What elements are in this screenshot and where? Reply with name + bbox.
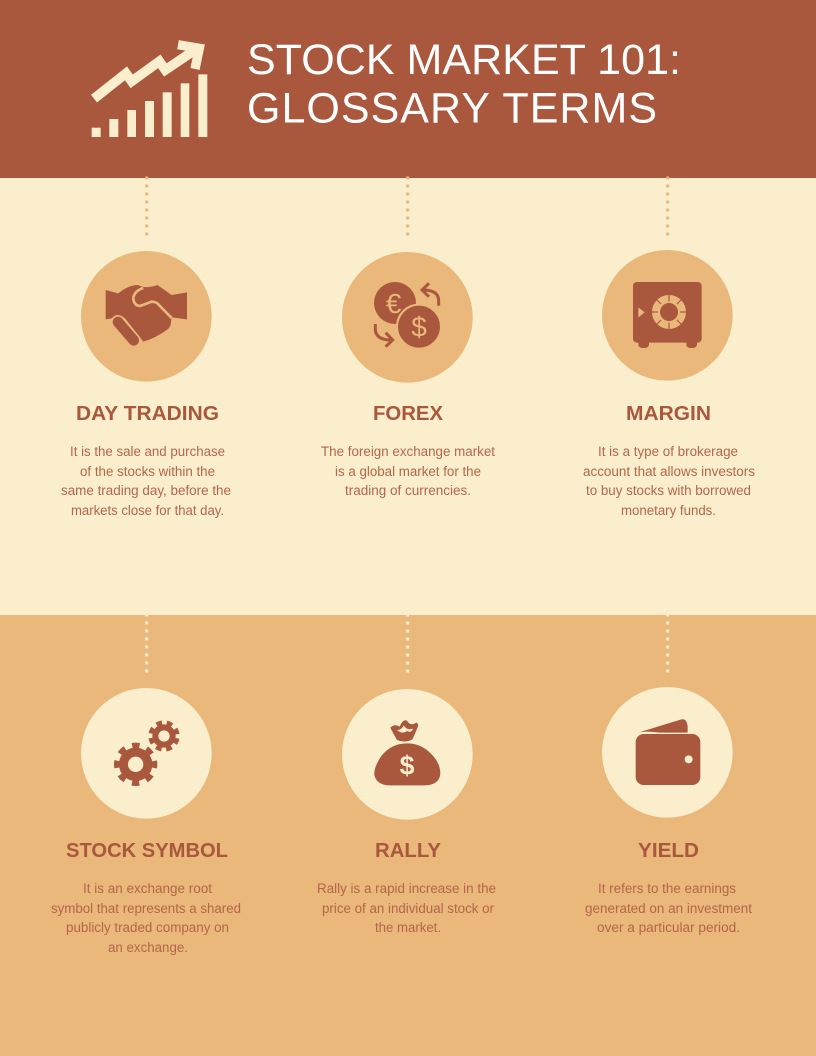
text: yield description: over a particular period. xyxy=(597,920,740,935)
icon: currency exchange: $ xyxy=(411,312,427,343)
panel: rally xyxy=(317,614,496,935)
text: day trading description: of the stocks within the xyxy=(80,464,215,479)
heading: forex: FOREX xyxy=(373,403,444,425)
icon: wallet xyxy=(602,687,733,818)
text: margin description xyxy=(583,444,755,518)
text: rally description xyxy=(317,881,496,935)
icon: currency exchange xyxy=(342,252,473,383)
text: yield description: generated on an investment xyxy=(585,901,752,916)
title xyxy=(247,36,681,132)
panel: stock symbol xyxy=(51,614,241,955)
text: forex description: is a global market for the xyxy=(335,464,481,479)
text: rally description: price of an individual stock or xyxy=(322,901,495,916)
text: forex description: trading of currencies. xyxy=(345,483,471,498)
text: rally description: the market. xyxy=(375,920,441,935)
text: day trading description: markets close for that day. xyxy=(71,503,224,518)
text: day trading description: same trading day, before the xyxy=(61,483,231,498)
icon: safe xyxy=(602,250,733,381)
icon: money bag xyxy=(342,689,473,820)
text: day trading description xyxy=(61,444,231,518)
panel: yield xyxy=(585,614,752,935)
icon: handshake xyxy=(81,251,212,382)
icon: currency exchange: € xyxy=(386,288,402,319)
icon: rising bar chart with arrow xyxy=(92,45,207,137)
text: margin description: account that allows investors xyxy=(583,464,755,479)
heading: rally: RALLY xyxy=(375,840,442,862)
heading: day trading: DAY TRADING xyxy=(76,403,219,425)
panel: day trading xyxy=(61,176,231,518)
text: day trading description: It is the sale and purchase xyxy=(70,444,225,459)
panel: margin xyxy=(583,176,755,518)
panel: header banner xyxy=(0,0,816,178)
title: STOCK MARKET 101: xyxy=(247,36,681,84)
text: rally description: Rally is a rapid increase in the xyxy=(317,881,496,896)
text: margin description: to buy stocks with borrowed xyxy=(586,483,751,498)
text: stock symbol description xyxy=(51,881,241,955)
icon: money bag: $ xyxy=(400,750,415,780)
heading: margin: MARGIN xyxy=(626,403,711,425)
text: stock symbol description: It is an exchange root xyxy=(83,881,212,896)
icon: gears xyxy=(81,688,212,819)
text: margin description: monetary funds. xyxy=(621,503,716,518)
text: yield description: It refers to the earnings xyxy=(598,881,736,896)
text: stock symbol description: symbol that represents a shared xyxy=(51,901,241,916)
heading: stock symbol: STOCK SYMBOL xyxy=(66,840,228,862)
text: yield description xyxy=(585,881,752,935)
text: forex description: The foreign exchange market xyxy=(321,444,495,459)
heading: yield: YIELD xyxy=(638,840,699,862)
text: stock symbol description: an exchange. xyxy=(108,940,188,955)
title: GLOSSARY TERMS xyxy=(247,84,657,132)
text: stock symbol description: publicly traded company on xyxy=(66,920,229,935)
text: margin description: It is a type of brokerage xyxy=(598,444,738,459)
panel: forex xyxy=(321,176,495,498)
text: forex description xyxy=(321,444,495,498)
